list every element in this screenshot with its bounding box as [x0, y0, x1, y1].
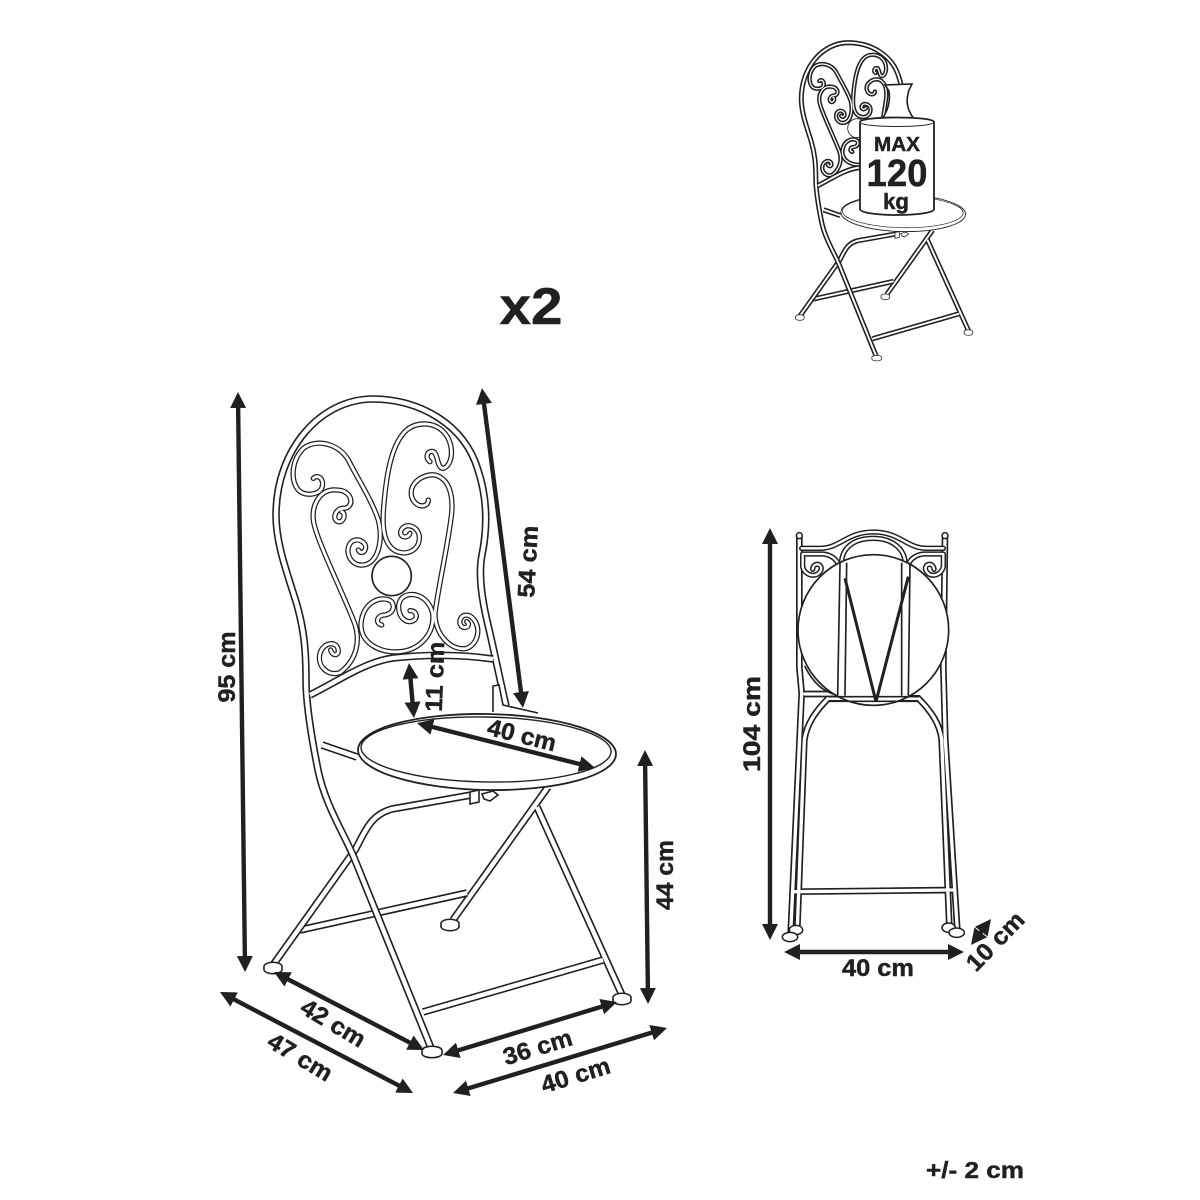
weight text: kg	[883, 189, 909, 214]
top rail and scrolls	[802, 532, 943, 575]
dimension: backrest 54 cm: 54 cm	[513, 525, 544, 598]
small chair with maximum load	[796, 43, 973, 361]
dimension: gap 11 cm: 11 cm	[421, 641, 450, 712]
dimension: seat 40 cm: 40 cm	[485, 714, 559, 757]
dimension: seat height 44 cm: 44 cm	[652, 840, 679, 910]
folded chair side view	[782, 532, 964, 942]
chair outline	[796, 43, 973, 361]
legs and frame	[782, 533, 964, 942]
dimension: folded height 104 cm: 104 cm	[739, 676, 766, 772]
dimension: total height 95 cm	[214, 404, 245, 960]
dimension: depth 47 cm: 47 cm	[262, 1028, 337, 1087]
weight text: 120	[866, 153, 928, 195]
dimension: inner width 36 cm	[454, 1006, 606, 1071]
dimension: total height 95 cm: 95 cm	[214, 632, 241, 702]
dimension: depth 47 cm	[231, 998, 402, 1087]
dimension: folded thickness 10 cm: 10 cm	[961, 907, 1030, 977]
main chair drawing	[264, 399, 631, 1058]
tolerance note: +/- 2 cm	[926, 1157, 1024, 1183]
icon: vase with weight label	[860, 84, 934, 215]
multiplier: x2: x2	[500, 278, 562, 336]
weight text	[866, 134, 928, 214]
dimension: folded width 40 cm: 40 cm	[842, 955, 914, 982]
weight text: MAX	[874, 134, 921, 156]
folded round seat	[798, 555, 949, 705]
dimension: inner width 36 cm: 36 cm	[500, 1025, 576, 1071]
dimension: outer width 40 cm	[464, 1032, 656, 1099]
dimension: outer width 40 cm: 40 cm	[538, 1053, 614, 1099]
dimension: inner depth 42 cm: 42 cm	[295, 994, 370, 1053]
dimension: seat 40 cm	[429, 714, 583, 765]
dimension: backrest 54 cm	[484, 400, 544, 696]
dimension: gap 11 cm	[410, 641, 450, 712]
dimension: inner depth 42 cm	[285, 978, 413, 1053]
